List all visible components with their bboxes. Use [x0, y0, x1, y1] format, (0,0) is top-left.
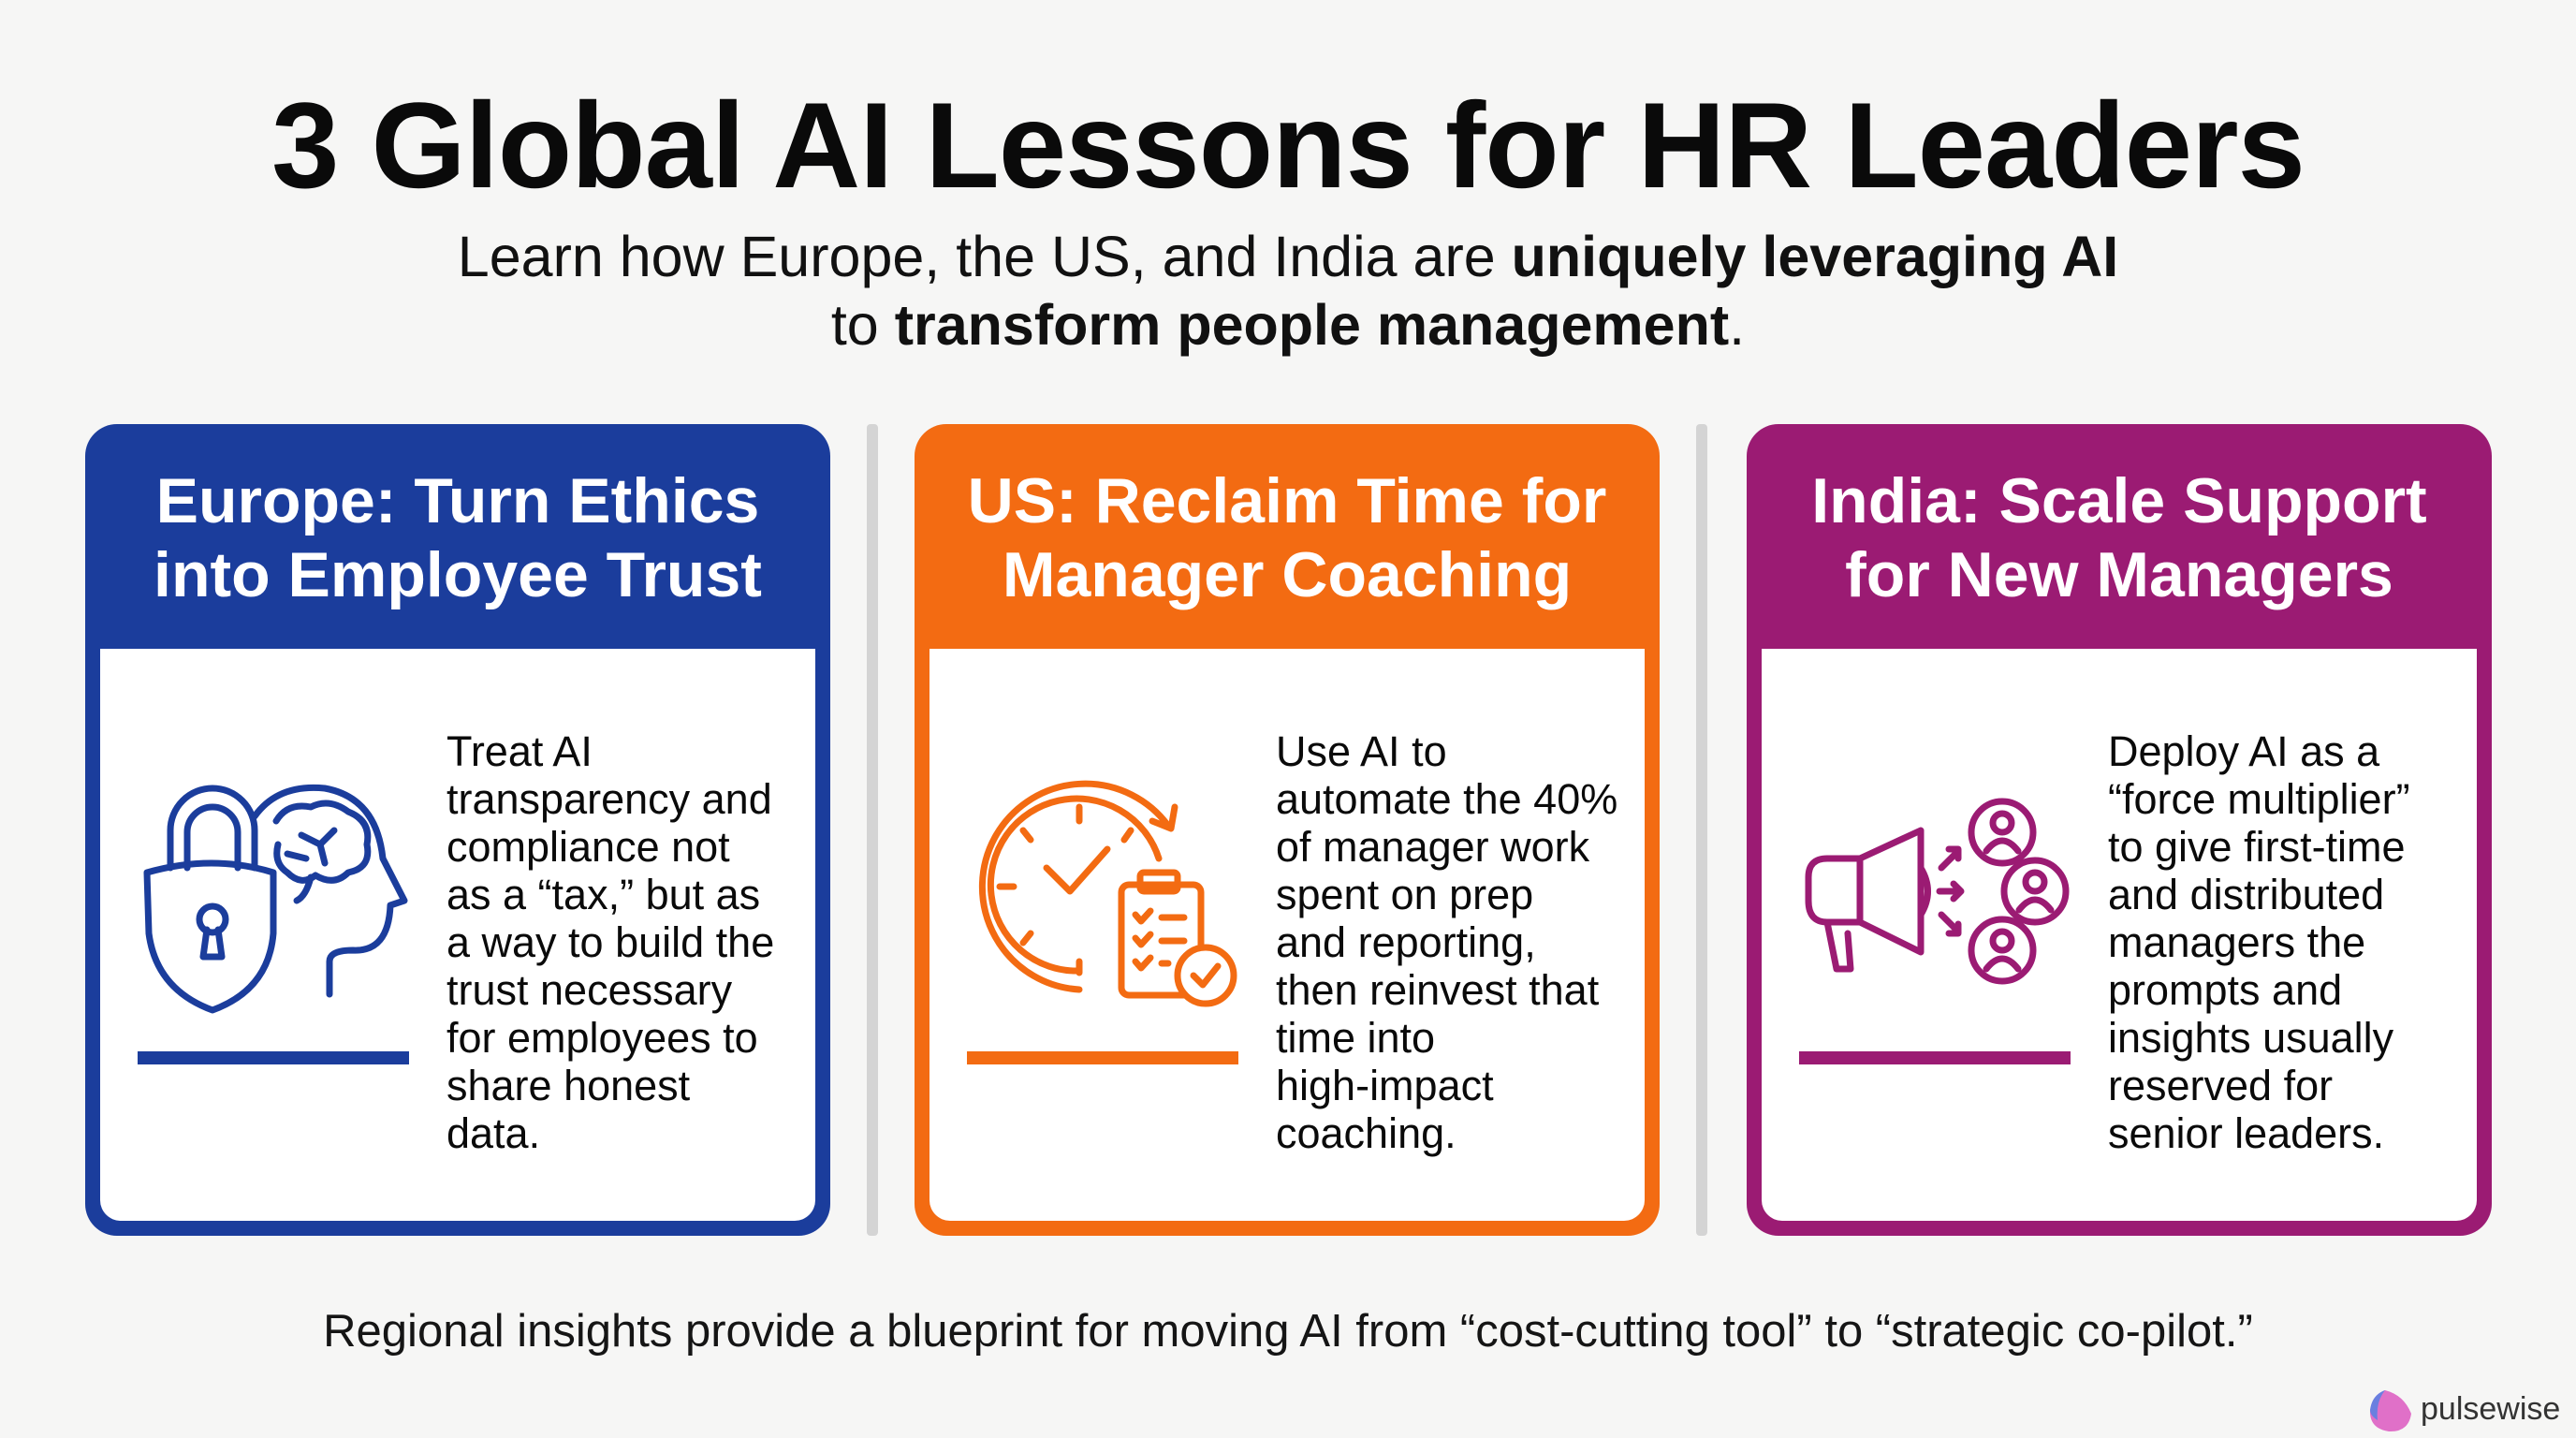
heading: India: for New Managers — [1845, 539, 2393, 610]
subtitle — [458, 225, 2118, 357]
heading: US: Manager Coaching — [1003, 539, 1572, 610]
heading: US: US: Reclaim Time for — [968, 465, 1606, 536]
text: Europe body: Treat AI — [446, 727, 593, 775]
text: Europe body: data. — [446, 1109, 540, 1157]
text: India body: and distributed — [2108, 871, 2384, 918]
panel: Europe — [85, 424, 830, 1236]
text: US body: of manager work — [1276, 823, 1589, 871]
panel: US — [915, 424, 1660, 1236]
heading: India — [1811, 465, 2427, 610]
heading: US — [968, 465, 1606, 610]
icon: megaphone and people — [1805, 798, 2069, 985]
text: Europe body: a way to build the — [446, 918, 774, 966]
text: Europe body: share honest — [446, 1062, 690, 1109]
text: Europe body: as a “tax,” but as — [446, 871, 760, 918]
accent bar — [967, 1051, 1238, 1064]
text: India body: to give first-time — [2108, 823, 2406, 871]
text: Europe body: compliance not — [446, 823, 730, 871]
text: US body: spent on prep — [1276, 871, 1533, 918]
heading: Europe — [154, 465, 762, 610]
logo: pulsewise — [2370, 1390, 2560, 1431]
heading: India: India: Scale Support — [1811, 465, 2427, 536]
accent bar — [138, 1051, 409, 1064]
logo: pulsewise: pulsewise — [2421, 1391, 2560, 1427]
title: 3 Global AI Lessons for HR Leaders — [271, 77, 2305, 213]
text: India body: senior leaders. — [2108, 1109, 2384, 1157]
text: Europe body: transparency and — [446, 775, 772, 823]
text: US body: then reinvest that — [1276, 966, 1599, 1014]
text: US body: Use AI to — [1276, 727, 1447, 775]
text: India body: “force multiplier” — [2108, 775, 2410, 823]
text: India body: insights usually — [2108, 1014, 2393, 1062]
text: US body: high-impact — [1276, 1062, 1494, 1109]
text: US body — [1276, 727, 1617, 1157]
icon: lock and brain — [144, 785, 408, 1013]
text: India body: Deploy AI as a — [2108, 727, 2379, 775]
panel: India — [1747, 424, 2492, 1236]
text: India body: managers the — [2108, 918, 2365, 966]
text: India body: reserved for — [2108, 1062, 2333, 1109]
accent bar — [1799, 1051, 2071, 1064]
icon: clock and checklist — [979, 781, 1237, 1007]
text: US body: automate the 40% — [1276, 775, 1617, 823]
text: US body: coaching. — [1276, 1109, 1456, 1157]
subtitle: Learn how Europe, the US, and India are uniquely leveraging AI — [458, 225, 2118, 288]
text: US body: and reporting, — [1276, 918, 1536, 966]
text: Europe body: for employees to — [446, 1014, 758, 1062]
footer text: Regional insights provide a blueprint for moving AI from “cost-cutting tool” to “strategic co-pilot.” — [323, 1306, 2253, 1357]
text: Europe body — [446, 727, 774, 1157]
text: India body — [2108, 727, 2410, 1157]
text: India body: prompts and — [2108, 966, 2342, 1014]
text: Europe body: trust necessary — [446, 966, 732, 1014]
text: US body: time into — [1276, 1014, 1435, 1062]
heading: Europe: into Employee Trust — [154, 539, 762, 610]
subtitle: to transform people management. — [831, 293, 1745, 357]
heading: Europe: Europe: Turn Ethics — [156, 465, 759, 536]
